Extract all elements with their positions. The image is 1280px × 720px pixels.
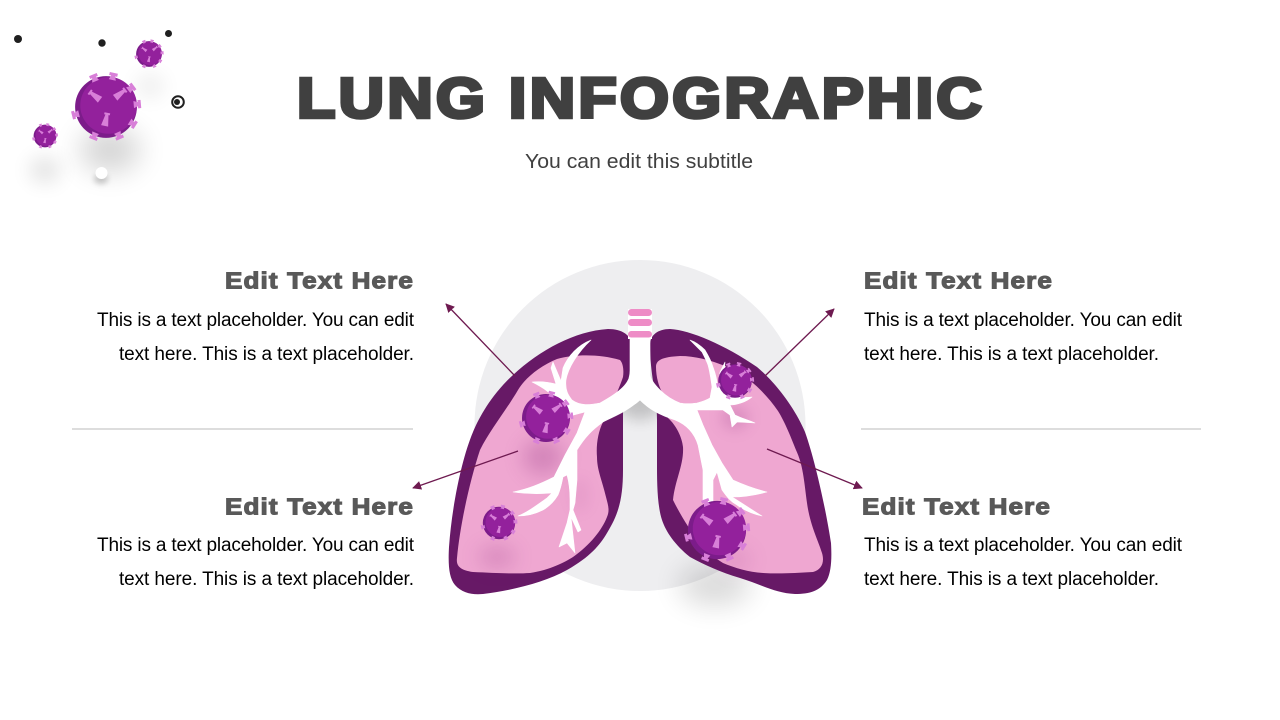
body: text here. This is a text placeholder. xyxy=(864,344,1159,365)
arrow: lower left xyxy=(413,451,518,488)
decoration: viruses and dots, top left xyxy=(14,30,184,184)
body: This is a text placeholder. You can edit xyxy=(97,310,415,331)
right lung pink xyxy=(656,356,823,573)
arrow: lower right xyxy=(767,449,862,488)
body: This is a text placeholder. You can edit xyxy=(97,535,415,556)
trachea xyxy=(628,309,652,339)
heading: Edit Text Here xyxy=(862,494,1051,520)
right text block, top xyxy=(864,268,1183,365)
left lung outer xyxy=(449,329,632,594)
body: This is a text placeholder. You can edit xyxy=(864,310,1183,331)
heading: Edit Text Here xyxy=(225,268,414,294)
background circle xyxy=(474,260,806,591)
tracheal rings xyxy=(628,309,652,338)
left lung virus, upper xyxy=(519,391,573,444)
right lung virus, upper xyxy=(716,362,754,399)
lung illustration xyxy=(449,309,831,594)
right text block, bottom xyxy=(862,494,1183,590)
body: text here. This is a text placeholder. xyxy=(864,569,1159,590)
heading: Edit Text Here xyxy=(225,494,414,520)
body: text here. This is a text placeholder. xyxy=(119,344,414,365)
arrow: upper right xyxy=(765,309,834,376)
bronchial tree, white xyxy=(513,337,767,553)
right lung virus, lower xyxy=(684,497,750,562)
body: This is a text placeholder. You can edit xyxy=(864,535,1183,556)
arrow: upper left xyxy=(446,304,515,376)
heading: Edit Text Here xyxy=(864,268,1053,294)
title: LUNG INFOGRAPHIC xyxy=(297,66,985,130)
left lung pink xyxy=(457,355,623,573)
left lung virus, lower xyxy=(481,505,517,541)
right lung outer xyxy=(650,329,831,594)
subtitle: You can edit this subtitle xyxy=(525,150,753,173)
left text block, bottom xyxy=(97,494,415,590)
soft shadows under lungs xyxy=(616,376,751,605)
left text block, top xyxy=(97,268,415,365)
pink shadows on lungs xyxy=(479,406,751,572)
body: text here. This is a text placeholder. xyxy=(119,569,414,590)
